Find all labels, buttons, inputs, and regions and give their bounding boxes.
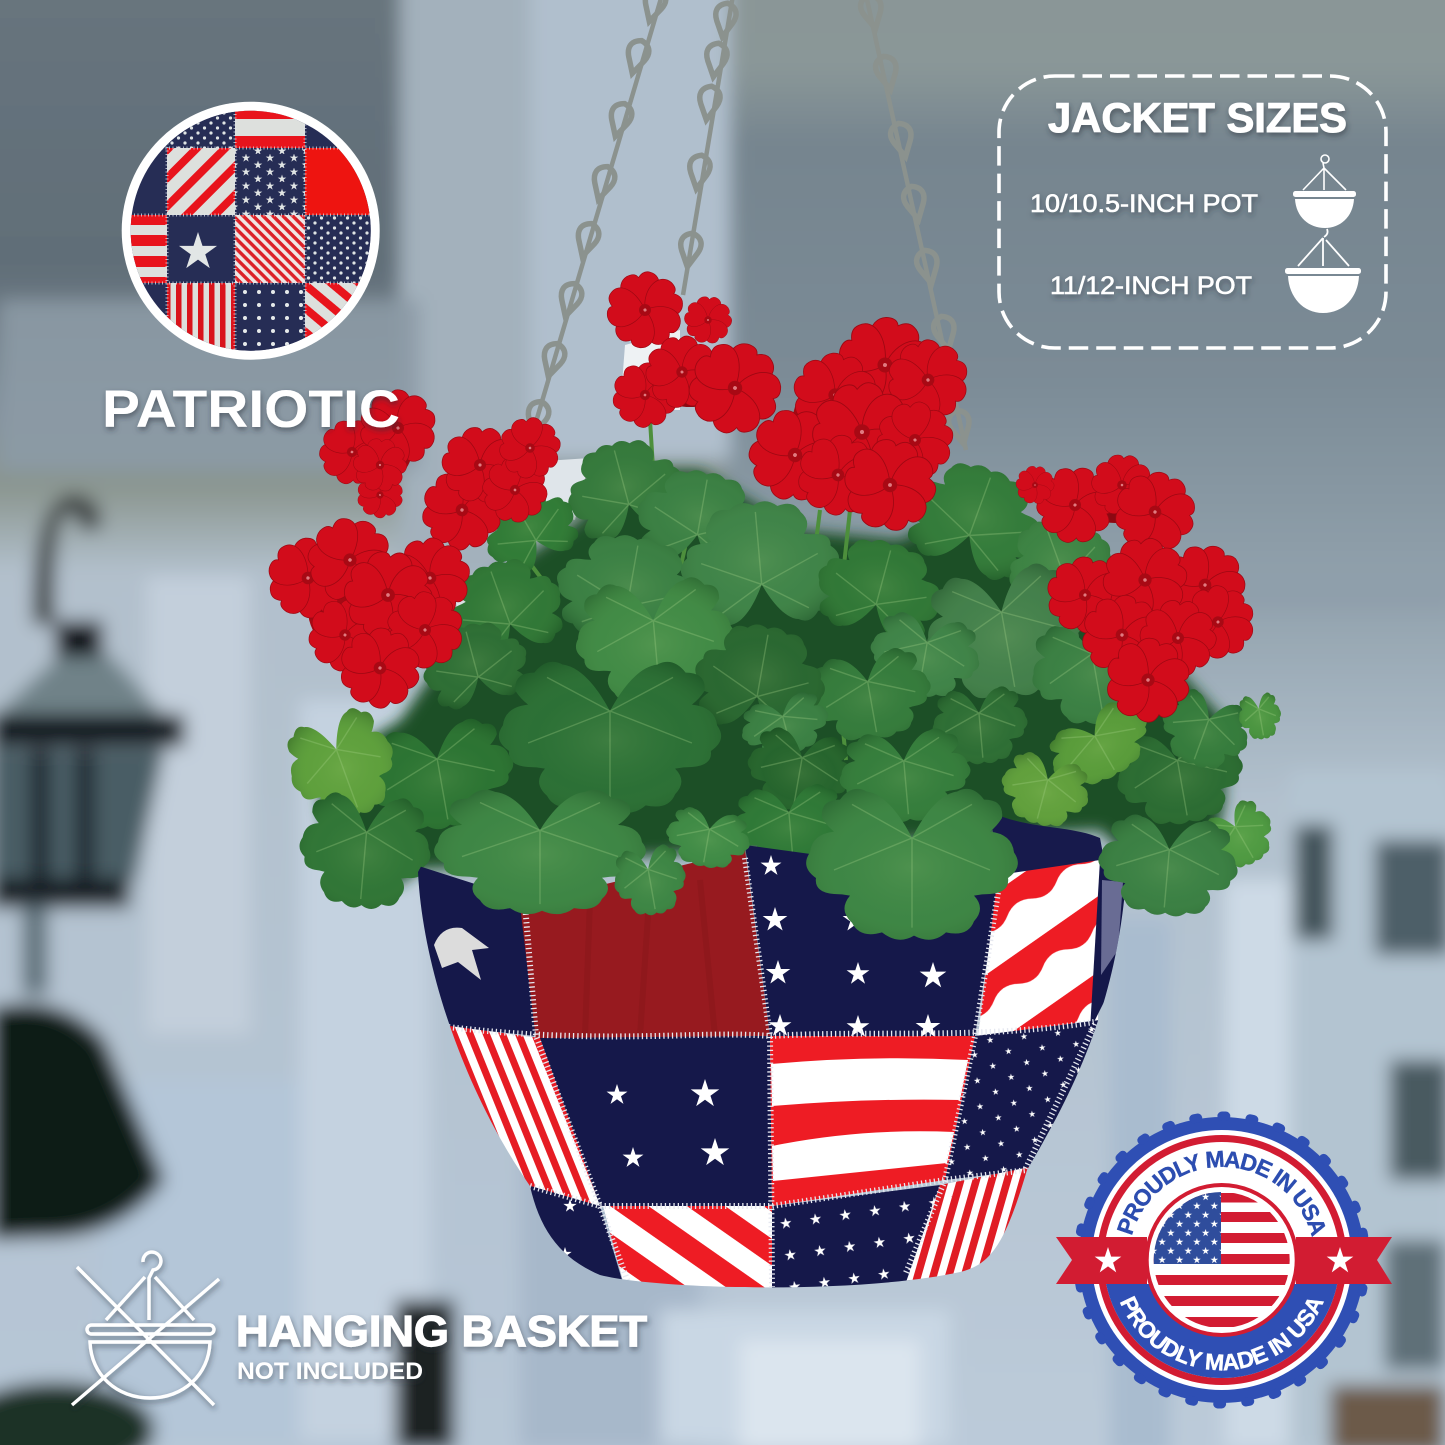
size label: large pot: 11/12-INCH POT (1050, 272, 1252, 300)
badge: bottom arc text: PROUDLY MADE IN USA (1120, 1296, 1324, 1371)
right chain (859, 0, 973, 450)
geranium leaves (275, 428, 1285, 914)
bloom cluster: centre large (725, 306, 985, 540)
bloom cluster: right lower (1037, 529, 1271, 737)
bloom cluster: upper left (304, 378, 452, 526)
badge: proudly made in USA (1056, 1112, 1392, 1408)
leaves overlapping jacket (434, 789, 1242, 940)
label: patriotic: PATRIOTIC (102, 380, 400, 439)
badge: ribbon (1056, 1237, 1392, 1284)
patch: horizontal stripes (770, 1036, 975, 1206)
bloom cluster: top centre (595, 263, 801, 458)
white pot rim behind plant (455, 330, 680, 625)
icon: large hanging pot (1285, 229, 1361, 313)
jacket gathered rim (990, 812, 1106, 880)
middle chain (677, 0, 738, 295)
left chain (523, 0, 668, 437)
patch: bottom star field (772, 1185, 940, 1288)
text: not included: NOT INCLUDED (237, 1358, 423, 1385)
badge: flag (1150, 1192, 1294, 1328)
patch: bottom thin stripes (906, 1167, 1029, 1280)
swatch: patriotic patchwork circle (120, 100, 380, 360)
red geranium blooms (258, 263, 1271, 737)
foliage mass (320, 420, 1225, 885)
bloom cluster: lower left (258, 499, 484, 723)
patch: navy with star (418, 866, 535, 1036)
patch: solid red (520, 850, 770, 1040)
badge: scalloped blue seal (1078, 1116, 1366, 1404)
badge: top arc text: PROUDLY MADE IN USA (1116, 1150, 1326, 1237)
patch: diagonal stripes (603, 1206, 772, 1288)
panel: jacket sizes (999, 76, 1386, 348)
text: hanging basket: HANGING BASKET (236, 1307, 647, 1356)
bloom cluster: right upper (1014, 452, 1210, 569)
patch: small star field (945, 1020, 1100, 1180)
patch: bottom navy (530, 1186, 622, 1280)
bloom cluster: left (406, 404, 573, 567)
icon: small hanging pot (1293, 155, 1356, 228)
patch: wavy red stripes (978, 860, 1100, 1036)
stitches (440, 858, 1095, 1287)
patch: navy edge (1090, 864, 1126, 1022)
patch: slanted stripes (450, 1026, 600, 1206)
patch: navy four stars (540, 1036, 772, 1206)
heading: jacket sizes: JACKET SIZES (1048, 94, 1347, 141)
dashed panel border (999, 76, 1386, 348)
size label: small pot: 10/10.5-INCH POT (1030, 190, 1258, 218)
icon: hanging basket crossed out (72, 1252, 219, 1405)
patch: navy stars (745, 845, 1000, 1038)
patchwork basket jacket (400, 812, 1130, 1300)
